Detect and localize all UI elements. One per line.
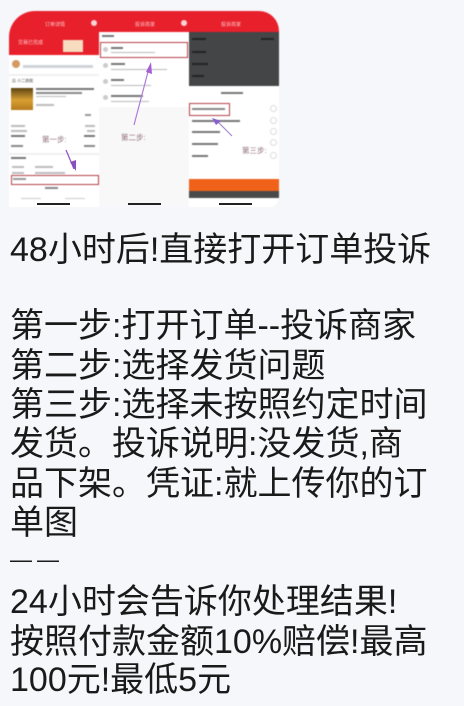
red header: 投诉商家 [221,22,241,28]
order info [11,157,26,159]
home indicator 3 [219,203,252,205]
orange button [189,179,279,191]
radio buttons [270,105,277,112]
text: steps: 发货。投诉说明:没发货,商 [10,425,403,463]
text: steps: 100元!最低5元 [10,661,231,699]
product image [11,88,33,110]
phone 3: complaint reason [189,11,279,207]
arrow: step 1 [66,150,76,171]
red order header: 交易已完成 [18,40,43,46]
text: steps: 24小时会告诉你处理结果! [10,583,397,621]
step 3 label: 第三步: [242,146,267,155]
home indicator 1 [37,203,70,205]
text: steps: 第三步:选择未按照约定时间 [10,386,427,424]
text: steps: 单图 [10,504,78,542]
reason title [221,92,243,94]
red order header [9,11,99,55]
red header [189,11,279,32]
step 2 label: 第二步: [121,133,146,142]
phone 2: complaint type [99,11,189,207]
red order header: 订单详情 [45,22,65,28]
text: steps: —— [10,547,64,572]
arrow: step 3 [212,118,232,136]
purple arrows [66,62,232,171]
price rows [11,125,25,127]
phone 1: order detail [9,11,99,207]
white list [99,32,189,107]
red header [99,11,189,32]
bottom actions [21,198,41,199]
red header: 投诉商家 [135,22,155,28]
more link [45,187,58,189]
complaint highlight box [11,175,99,185]
text: heading line: 48小时后!直接打开订单投诉 [10,231,431,269]
text: steps: 第二步:选择发货问题 [10,347,325,385]
logistics row [12,60,20,68]
home indicator 2 [128,203,161,205]
text: steps: 按照付款金额10%赔偿!最高 [10,623,428,661]
shop name: 店 小二旗舰 [12,78,33,83]
reason highlight box [189,103,230,116]
arrow: step 2 [134,62,152,125]
product text [36,88,94,90]
text: steps: 第一步:打开订单--投诉商家 [10,307,416,345]
dark overlay [189,32,279,86]
text: steps: 品下架。凭证:就上传你的订 [10,465,427,503]
reason rows [192,120,240,122]
step 1 label: 第一步: [42,135,67,144]
screenshot panel: three phone screens [9,11,279,207]
delivery highlight box [100,42,188,58]
